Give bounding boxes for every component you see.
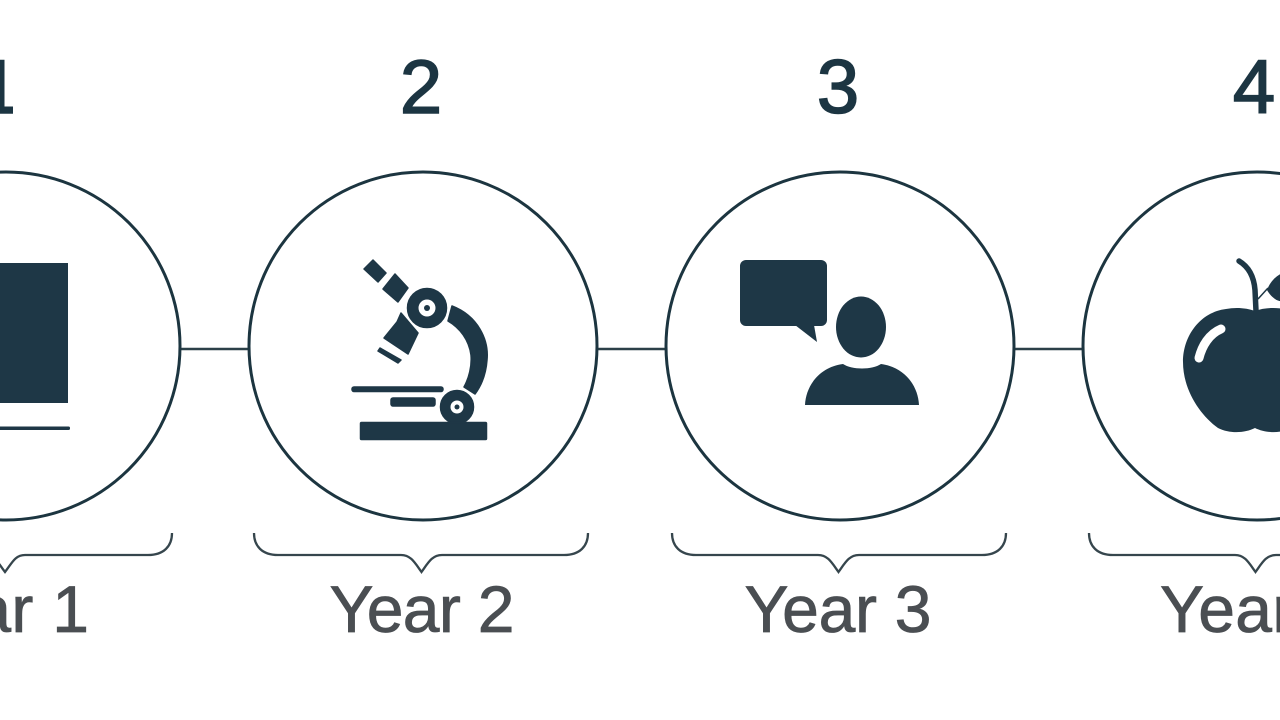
step 3 [666,45,1014,646]
circle 4 [1083,172,1280,520]
label: Year 3: Year 3 [744,572,932,646]
icon: speaker with speech bubble [740,260,919,405]
step 1 [0,45,180,646]
icon: microscope [352,260,487,440]
step 4 [1083,45,1280,646]
bracket 3 [672,533,1006,572]
step 2 [249,45,597,646]
number 4: 4 [1233,45,1275,130]
circle 3 [666,172,1014,520]
connectors [181,348,1082,350]
icon: apple [1183,261,1280,432]
circle 2 [249,172,597,520]
timeline infographic [0,58,1280,633]
icon: book [0,263,70,430]
bracket 2 [254,533,588,572]
label: Year 2: Year 2 [330,572,514,646]
number 2: 2 [400,45,442,130]
number 3: 3 [817,45,859,130]
bracket 4 [1089,533,1280,572]
circle 1 [0,172,180,520]
bracket 1 [0,533,172,572]
